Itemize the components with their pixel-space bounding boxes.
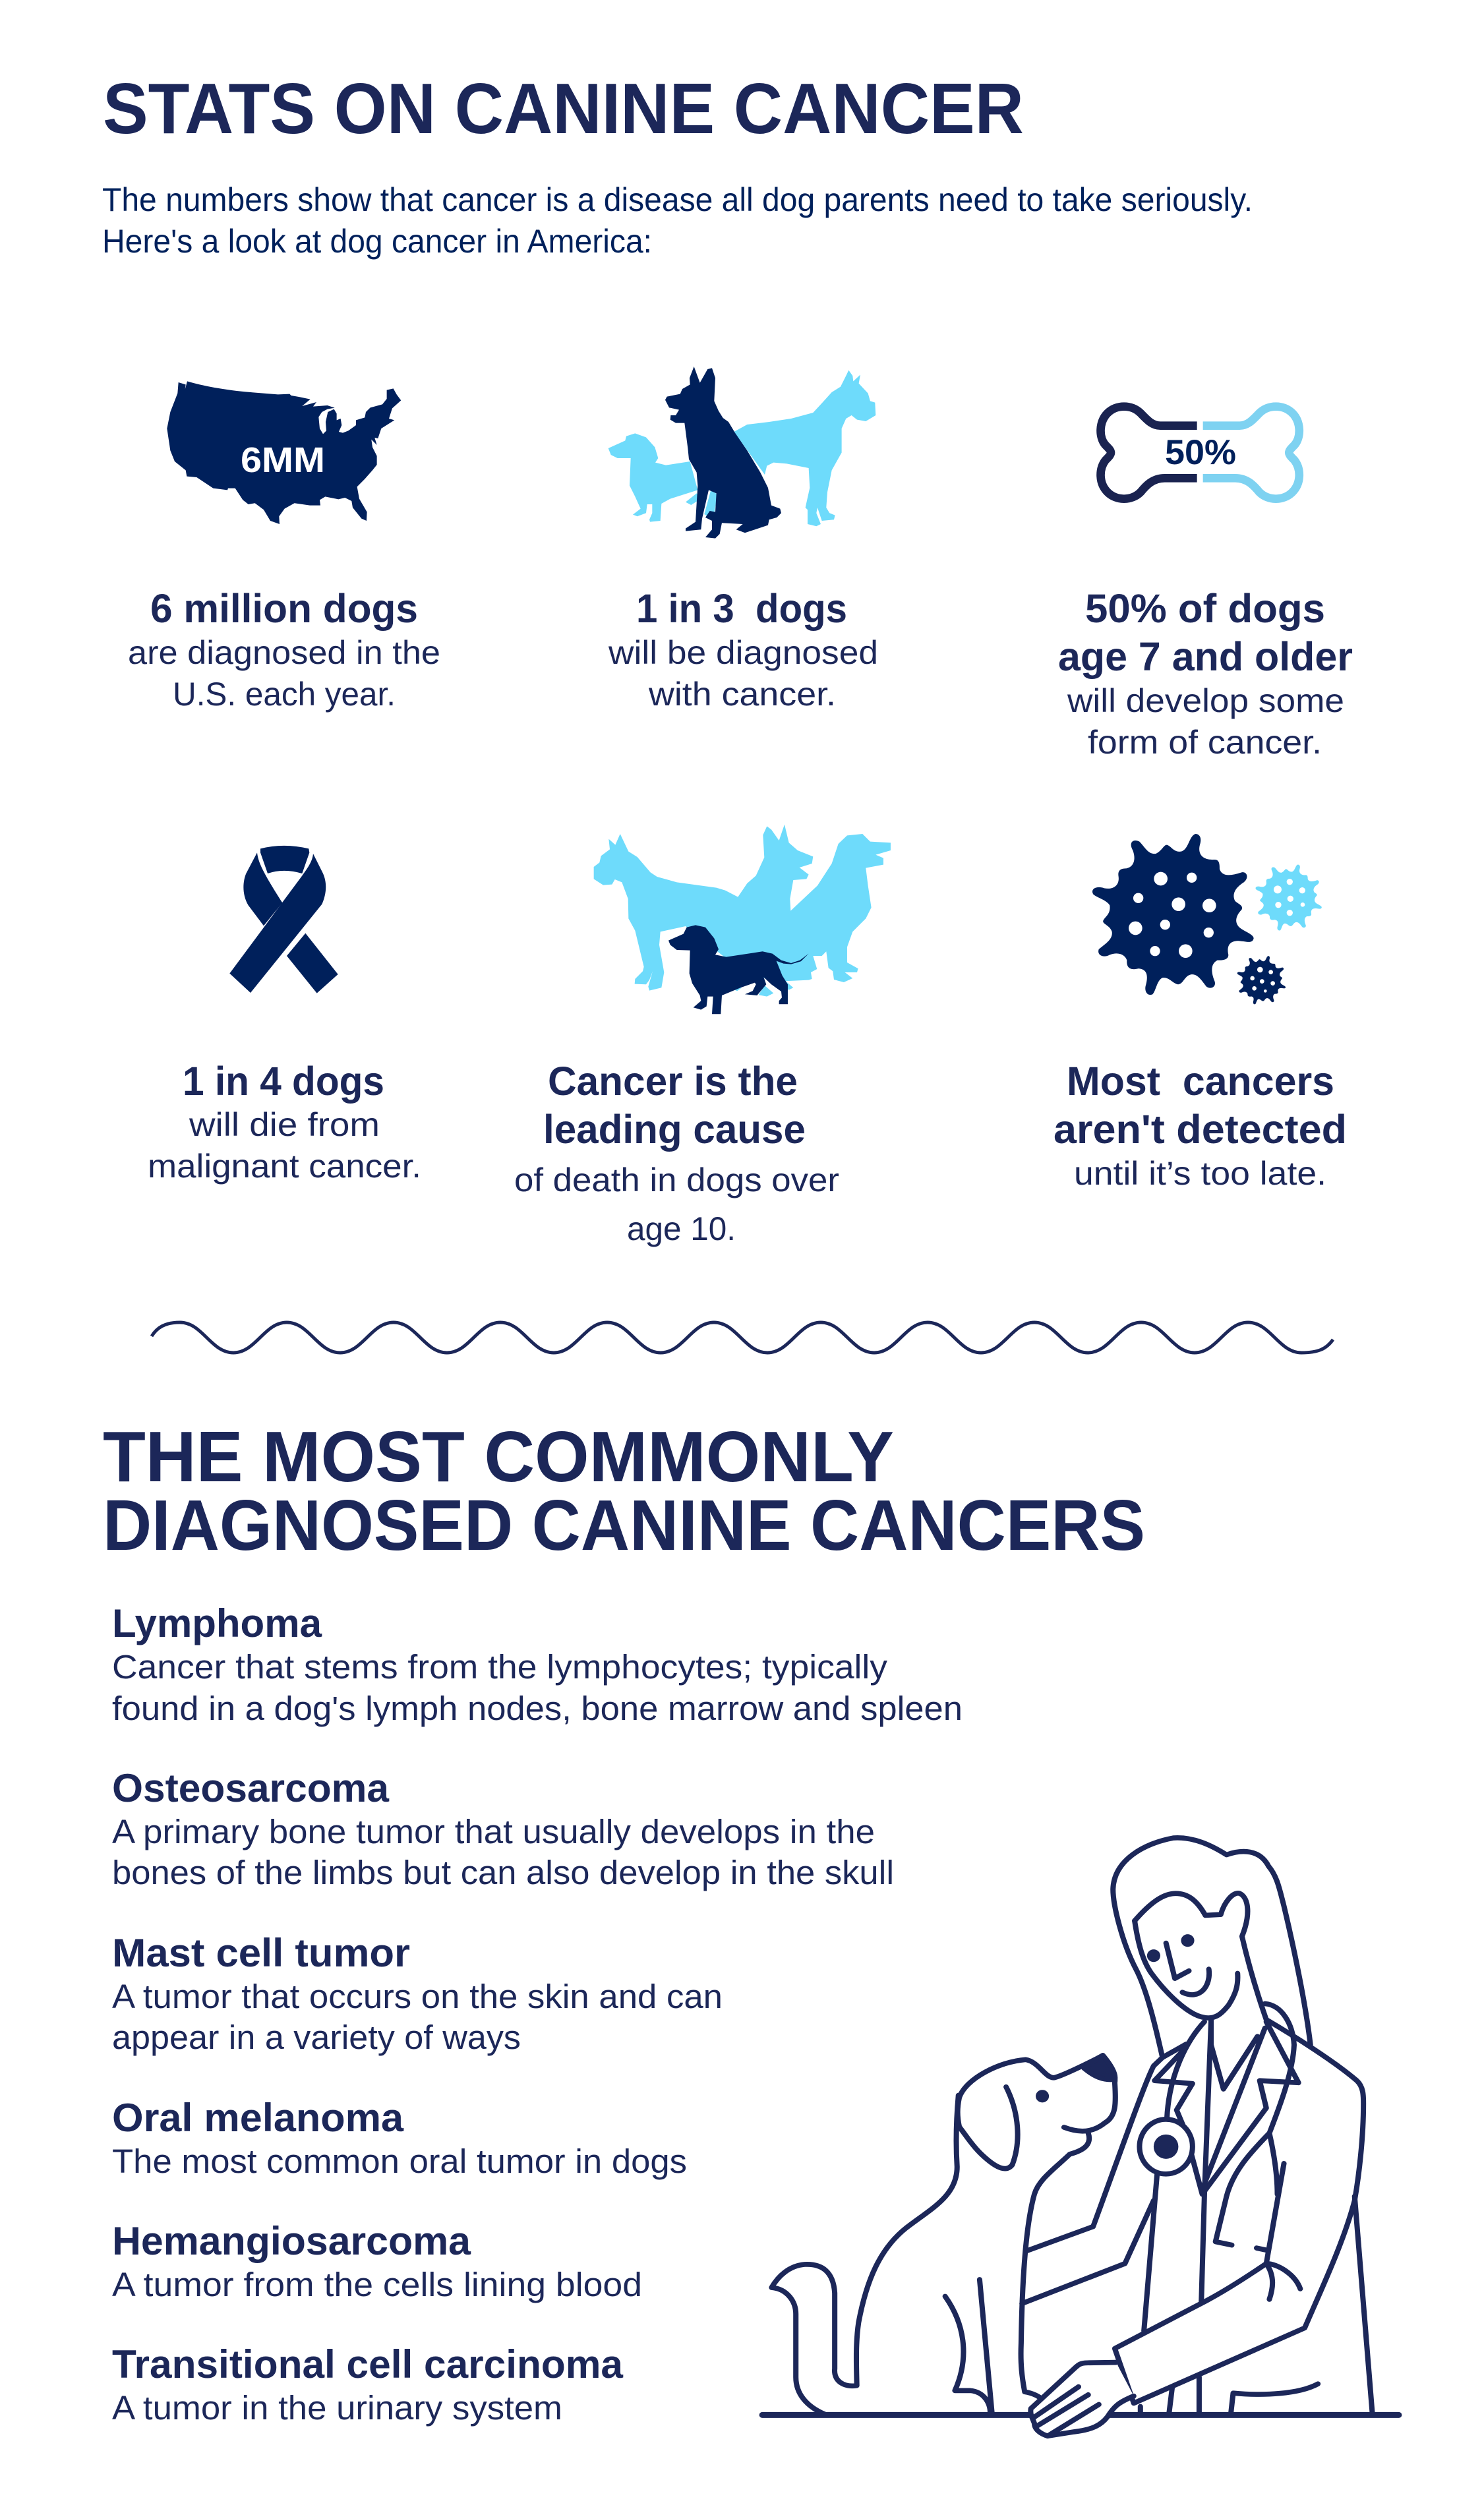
stat: most cancers aren't detected [1054, 1059, 1347, 1192]
cancer: mast cell tumor: appear in a variety of ways [112, 2019, 521, 2056]
cancer: osteosarcoma: A primary bone tumor that usually develops in the [112, 1813, 875, 1850]
heading: most commonly diagnosed canine cancers: DIAGNOSED CANINE CANCERS [103, 1485, 1145, 1566]
stat: 1 in 4 dogs: will die from [189, 1106, 380, 1143]
intro text [102, 181, 1253, 260]
cancer: mast cell tumor: A tumor that occurs on the skin and can [112, 1978, 723, 2015]
stat: 6 million dogs [128, 586, 440, 713]
stat: cancer is the leading cause: leading cause [543, 1107, 806, 1152]
cancer: oral melanoma: Oral melanoma [112, 2096, 404, 2140]
cancer: transitional cell carcinoma: Transitional cell carcinoma [112, 2342, 624, 2386]
stat: 1 in 3 dogs [608, 586, 878, 713]
stat: most cancers aren't detected: aren't detected [1054, 1107, 1347, 1152]
icon: bone with 50%: 50% [1165, 433, 1236, 472]
stat: 50% of dogs age 7 and older: age 7 and older [1058, 634, 1353, 679]
stat: 6 million dogs: are diagnosed in the [128, 634, 440, 671]
cancer: lymphoma: Lymphoma [112, 1601, 322, 1645]
cancer: lymphoma [112, 1601, 963, 1727]
stat: 6 million dogs: 6 million dogs [150, 586, 418, 631]
cancer: osteosarcoma: bones of the limbs but can also develop in the skull [112, 1854, 894, 1891]
cancer: oral melanoma: The most common oral tumor in dogs [112, 2142, 687, 2180]
stat: 1 in 3 dogs: with cancer. [648, 676, 836, 713]
cancer: osteosarcoma: Osteosarcoma [112, 1766, 390, 1810]
cancer: mast cell tumor [112, 1931, 723, 2056]
icon: three dogs, one highlighted [608, 367, 876, 539]
title: stats on canine cancer: STATS ON CANINE CANCER [103, 69, 1024, 149]
stat: most cancers aren't detected: until it’s too late. [1074, 1155, 1326, 1192]
icon: USA map with 6MM: 6MM [241, 440, 325, 480]
cancer: hemangiosarcoma: A tumor from the cells lining blood [112, 2266, 642, 2303]
illustration: vet examining dog [762, 1838, 1399, 2436]
icon: bone with 50% [1101, 407, 1299, 499]
stat: most cancers aren't detected: Most cancers [1067, 1059, 1334, 1104]
cancer: hemangiosarcoma [112, 2219, 642, 2303]
stat: 1 in 4 dogs: 1 in 4 dogs [183, 1059, 384, 1104]
intro text: Here's a look at dog cancer in America: [102, 223, 652, 260]
heading: most commonly diagnosed canine cancers [103, 1417, 1145, 1566]
stat: cancer is the leading cause: age 10. [627, 1210, 736, 1247]
cancer: oral melanoma [112, 2096, 687, 2180]
stat: 50% of dogs age 7 and older: form of cancer. [1088, 724, 1322, 761]
stat: 50% of dogs age 7 and older [1058, 586, 1353, 761]
cancer: lymphoma: found in a dog's lymph nodes, bone marrow and spleen [112, 1690, 963, 1727]
icon: awareness ribbon [229, 846, 338, 993]
stat: 6 million dogs: U.S. each year. [173, 676, 396, 713]
icon: cancer cells [1092, 834, 1322, 1004]
stat: 1 in 4 dogs: malignant cancer. [148, 1148, 421, 1185]
icon: USA map with 6MM [167, 381, 401, 524]
icon: four dogs with dachshund [594, 825, 891, 1014]
cancer: mast cell tumor: Mast cell tumor [112, 1931, 410, 1975]
stat: 1 in 3 dogs: 1 in 3 dogs [636, 586, 847, 631]
heading: most commonly diagnosed canine cancers: THE MOST COMMONLY [103, 1417, 894, 1497]
stat: 1 in 4 dogs [148, 1059, 421, 1185]
stat: cancer is the leading cause: of death in dogs over [514, 1162, 839, 1198]
intro text: The numbers show that cancer is a disease all dog parents need to take seriously. [102, 181, 1253, 218]
stat: cancer is the leading cause: Cancer is the [548, 1059, 798, 1104]
stat: cancer is the leading cause [514, 1059, 839, 1247]
stat: 50% of dogs age 7 and older: 50% of dogs [1085, 586, 1325, 631]
cancer: transitional cell carcinoma: A tumor in the urinary system [112, 2389, 562, 2427]
cancer: hemangiosarcoma: Hemangiosarcoma [112, 2219, 471, 2263]
stat: 50% of dogs age 7 and older: will develop some [1067, 682, 1344, 719]
cancer: osteosarcoma [112, 1766, 894, 1891]
cancer: lymphoma: Cancer that stems from the lymphocytes; typically [112, 1648, 888, 1686]
cancer: transitional cell carcinoma [112, 2342, 624, 2427]
stat: 1 in 3 dogs: will be diagnosed [608, 634, 878, 671]
